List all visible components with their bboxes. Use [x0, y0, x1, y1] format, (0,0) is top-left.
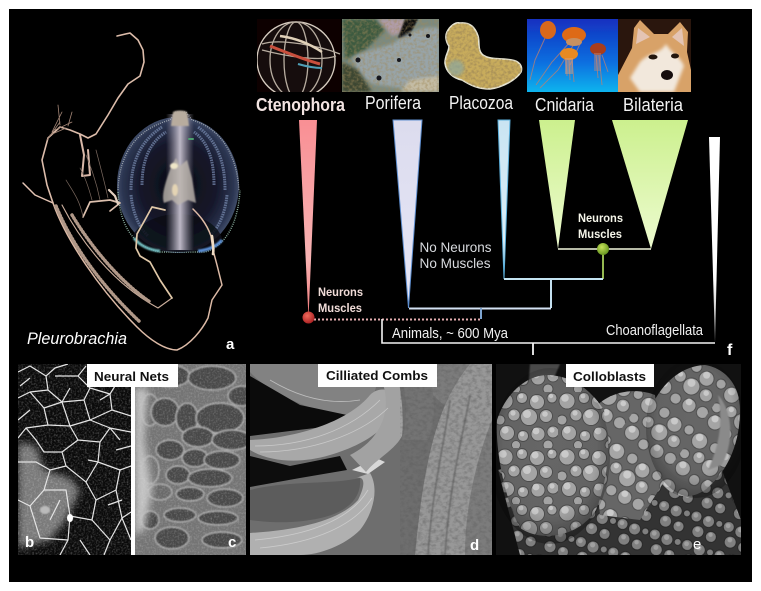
panel letter a: a	[226, 336, 235, 353]
thumbnail: Placozoa	[443, 20, 523, 92]
node: Cnidaria and Bilateria	[597, 243, 609, 255]
thumbnail: Ctenophora	[257, 19, 341, 98]
label: No Neurons No Muscles: No Muscles	[420, 256, 491, 271]
label box: Cilliated Combs: Cilliated Combs	[326, 369, 428, 383]
panel letter d: d	[470, 537, 479, 554]
middle lobe	[598, 391, 662, 520]
panel d: ciliated combs	[250, 364, 492, 555]
label: Choanoflagellata: Choanoflagellata	[606, 323, 704, 339]
panel c: neural net	[135, 364, 256, 555]
thumbnail: Cnidaria	[527, 19, 618, 92]
label: Neurons Muscles, Ctenophora: Neurons	[318, 287, 363, 299]
label: No Neurons No Muscles	[420, 240, 492, 271]
left lobe	[490, 368, 610, 544]
label box: Colloblasts: Colloblasts	[573, 370, 646, 384]
right lobe	[646, 365, 740, 498]
label: Cnidaria: Cnidaria	[535, 94, 595, 115]
label: Ctenophora: Ctenophora	[256, 94, 346, 115]
branch lines	[314, 249, 715, 355]
label: Neurons Muscles, Cnidaria and Bilateria	[578, 213, 623, 241]
phylogenetic tree	[299, 120, 733, 359]
label: Neurons Muscles, Cnidaria and Bilateria: Muscles	[578, 229, 622, 241]
tentacles	[23, 33, 222, 350]
panel letter b: b	[25, 534, 34, 551]
label box: Neural Nets	[87, 364, 178, 387]
label box: Neural Nets: Neural Nets	[94, 370, 169, 384]
panel b: neural net	[18, 364, 131, 555]
white divider	[131, 387, 135, 555]
clade wedge: Choanoflagellata	[709, 137, 720, 343]
panel a: Pleurobrachia photograph	[23, 33, 240, 353]
clade wedge: Bilateria	[612, 120, 688, 249]
lower dark lobes	[498, 469, 741, 555]
node: Ctenophora	[302, 312, 314, 324]
label: Bilateria: Bilateria	[623, 94, 684, 115]
label: No Neurons No Muscles: No Neurons	[420, 240, 492, 255]
label: Neurons Muscles, Ctenophora: Muscles	[318, 303, 362, 315]
panel e: colloblasts	[490, 358, 746, 555]
panel letter e: e	[693, 536, 701, 553]
clade wedge: Porifera	[393, 120, 422, 308]
label: Animals 600 Mya: Animals, ~ 600 Mya	[392, 326, 509, 342]
clade wedge: Ctenophora	[299, 120, 317, 318]
label: Neurons Muscles, Ctenophora	[318, 287, 363, 315]
thumbnail row	[257, 19, 691, 98]
label box: Colloblasts	[566, 364, 654, 387]
label: Pleurobrachia: Pleurobrachia	[27, 329, 127, 348]
clade wedge: Cnidaria	[539, 120, 575, 249]
clade labels	[256, 92, 684, 115]
panel letter c: c	[228, 534, 236, 551]
label: Placozoa: Placozoa	[449, 92, 514, 113]
label: Porifera: Porifera	[365, 92, 422, 113]
thumbnail: Porifera	[342, 19, 439, 92]
comb jelly body	[117, 110, 240, 253]
panel letter f: f	[727, 342, 733, 359]
label: Neurons Muscles, Cnidaria and Bilateria: Neurons	[578, 213, 623, 225]
clade wedge: Placozoa	[498, 120, 510, 279]
label box: Cilliated Combs	[318, 364, 437, 387]
thumbnail: Bilateria dog	[618, 19, 691, 92]
